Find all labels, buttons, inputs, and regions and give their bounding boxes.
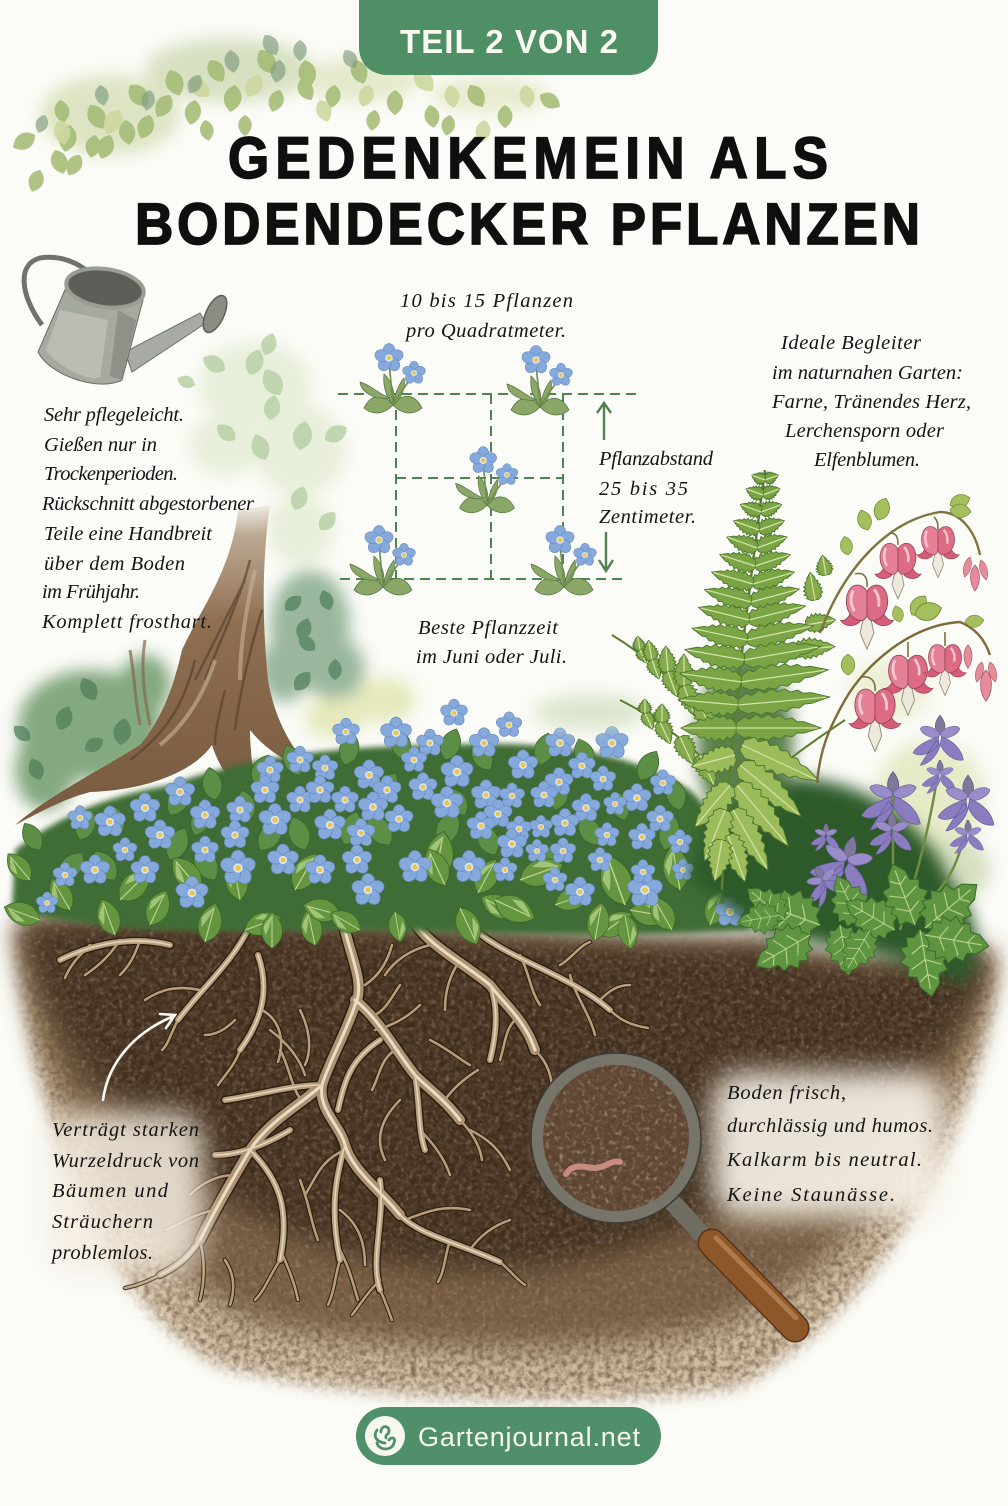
- header banner: TEIL 2 VON 2: [400, 23, 618, 60]
- text: care: Sehr pflegeleicht.: [44, 404, 184, 426]
- foreground serrated leaves: [735, 856, 993, 1001]
- text: spacing: Pflanzabstand: [598, 448, 714, 470]
- tree trunk: [15, 505, 312, 825]
- footer logo badge: [356, 1407, 661, 1465]
- fronds: side pinnae: [631, 554, 837, 790]
- title: BODENDECKER PFLANZEN: [135, 192, 920, 257]
- text: care: [41, 404, 255, 633]
- text: spacing: Zentimeter.: [599, 506, 696, 528]
- text: soil requirements: Keine Staunässe.: [726, 1184, 895, 1206]
- icon: logo: [365, 1416, 405, 1456]
- fern: [612, 469, 845, 890]
- text: care: Komplett frosthart.: [41, 611, 212, 633]
- text: soil requirements: Kalkarm bis neutral.: [726, 1149, 922, 1171]
- text: root pressure: problemlos.: [50, 1242, 153, 1264]
- companion leaves: [839, 491, 984, 675]
- text: plant count: [400, 290, 573, 342]
- text: companions: Ideale Begleiter: [780, 332, 922, 354]
- text: spacing: [598, 448, 714, 528]
- text: companions: Lerchensporn oder: [784, 420, 945, 442]
- pale background wash: [535, 660, 990, 900]
- text: care: über dem Boden: [44, 553, 185, 575]
- white arrow on soil: [103, 1014, 175, 1100]
- text: spacing: 25 bis 35: [599, 478, 688, 500]
- plant 1: [360, 344, 427, 413]
- text: plant count: pro Quadratmeter.: [404, 320, 566, 342]
- earthworm: [566, 1162, 620, 1174]
- foliage leaves: [1, 829, 733, 950]
- text: care: Teile eine Handbreit: [44, 523, 213, 545]
- roots: [60, 912, 648, 1320]
- soil cross-section: [0, 905, 1008, 1435]
- text: companions: [771, 332, 971, 471]
- text: root pressure: Sträuchern: [52, 1211, 153, 1233]
- text: care: im Frühjahr.: [42, 581, 140, 603]
- text: root pressure: [50, 1119, 199, 1264]
- text: root pressure: Bäumen und: [52, 1180, 169, 1202]
- groundcover forget-me-not bed: [1, 699, 751, 950]
- spacing grid with small plants: [338, 344, 636, 595]
- top-left hanging foliage: [9, 31, 564, 194]
- light patch: right note: [712, 1072, 944, 1217]
- blue flowers: [35, 699, 746, 928]
- text: planting time: Beste Pflanzzeit: [418, 617, 559, 639]
- title: GEDENKEMEIN ALS: [228, 126, 828, 191]
- mid foliage leaves: [17, 726, 689, 887]
- text: plant count: 10 bis 15 Pflanzen: [400, 290, 573, 312]
- light patch: left note: [48, 1112, 203, 1272]
- text: root pressure: Wurzeldruck von: [52, 1150, 199, 1172]
- text: root pressure: Verträgt starken: [52, 1119, 199, 1141]
- text: planting time: im Juni oder Juli.: [416, 646, 567, 668]
- text: care: Gießen nur in: [44, 434, 157, 456]
- text: soil requirements: [726, 1082, 933, 1206]
- text: care: Trockenperioden.: [44, 463, 178, 485]
- icon: magnifying glass: [531, 1053, 796, 1328]
- footer logo badge: Gartenjournal.net: [418, 1422, 640, 1452]
- text: companions: Elfenblumen.: [813, 449, 920, 471]
- fronds: main pinnae: [677, 469, 831, 742]
- bleeding heart stems and flowers: [817, 491, 999, 783]
- tree foliage: [10, 331, 415, 810]
- text: care: Rückschnitt abgestorbener: [41, 493, 255, 515]
- text: companions: Farne, Tränendes Herz,: [771, 391, 971, 413]
- purple corydalis: [797, 715, 994, 930]
- spacing arrows: [597, 403, 613, 571]
- text: companions: im naturnahen Garten:: [772, 362, 963, 384]
- right plant mass: [690, 655, 978, 985]
- header banner: [359, 0, 658, 75]
- text: soil requirements: durchlässig und humos.: [727, 1115, 933, 1137]
- title: [135, 126, 920, 257]
- icon: watering can: [24, 257, 232, 384]
- text: soil requirements: Boden frisch,: [727, 1082, 846, 1104]
- text: planting time: [416, 617, 567, 668]
- fronds: lower fan: [685, 731, 826, 886]
